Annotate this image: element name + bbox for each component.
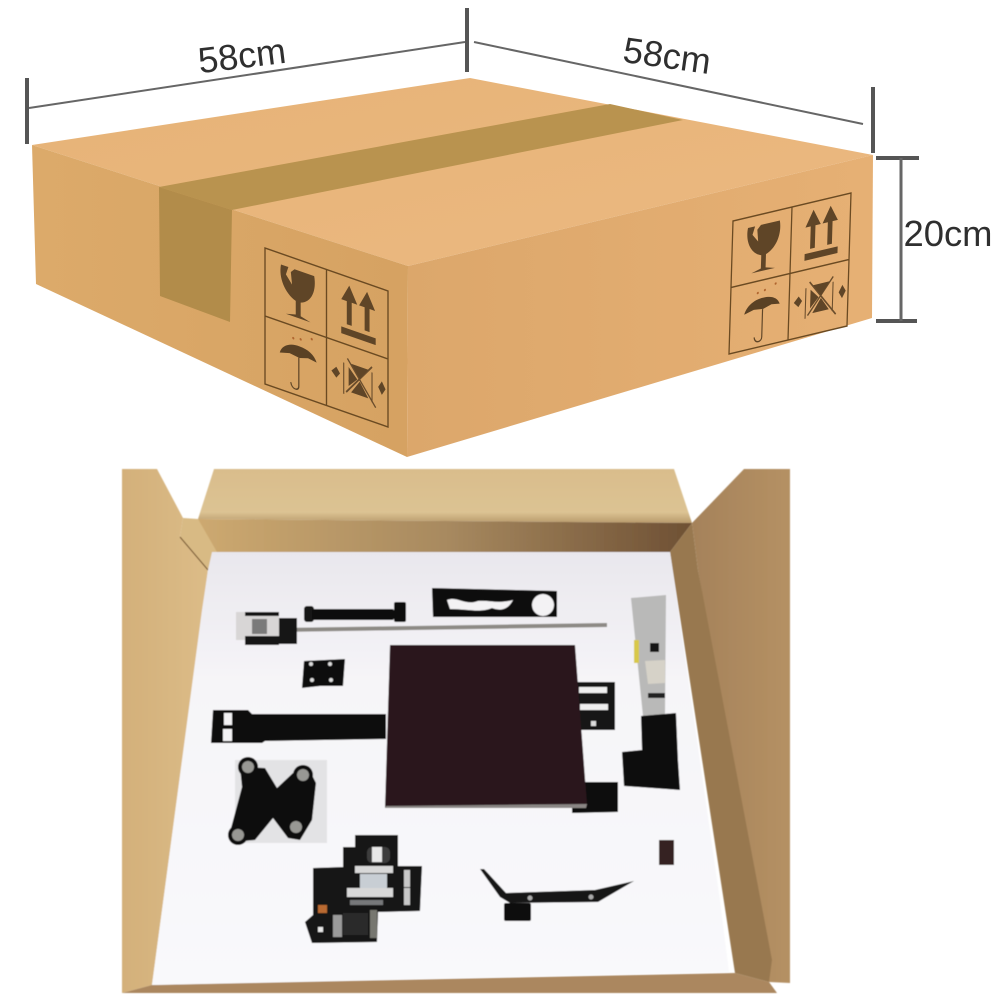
packing tape bbox=[159, 104, 683, 322]
rail corner block bbox=[572, 782, 618, 813]
bottom edge strip bbox=[122, 973, 777, 993]
dimension: right width: 58cm bbox=[621, 29, 714, 82]
Z column bbox=[622, 595, 680, 790]
handling marks: right face bbox=[729, 193, 851, 354]
horizontal rail bbox=[211, 710, 386, 743]
dimension: left width: 58cm bbox=[196, 30, 288, 81]
spool holder bbox=[480, 869, 634, 921]
right inner wall bbox=[670, 523, 772, 982]
handling marks: left face bbox=[265, 248, 388, 427]
cardboard box bbox=[32, 78, 873, 457]
dimension: height: 20cm bbox=[904, 213, 992, 254]
small mounting plate bbox=[302, 659, 345, 688]
cutout template bbox=[432, 588, 557, 617]
dimension: height bbox=[876, 158, 992, 321]
opened box photo bbox=[122, 469, 790, 993]
left flap bbox=[122, 469, 208, 993]
print bed bbox=[385, 645, 587, 808]
extruder assembly bbox=[305, 835, 422, 943]
right rail end bbox=[575, 682, 615, 730]
top flap bbox=[198, 469, 692, 523]
dimension: left width bbox=[27, 8, 467, 144]
roller part bbox=[304, 602, 406, 622]
right flap bbox=[692, 469, 790, 983]
stepper motor and lead screw bbox=[236, 612, 607, 645]
back wall of box bbox=[198, 519, 692, 552]
box top face bbox=[32, 78, 873, 266]
foam tray bbox=[152, 552, 729, 985]
small spare block bbox=[659, 840, 674, 865]
carriage plate bbox=[228, 757, 327, 845]
box right face bbox=[407, 155, 873, 457]
left corner gusset bbox=[180, 518, 217, 570]
box left face bbox=[32, 145, 408, 457]
dimension: right width bbox=[474, 29, 873, 153]
